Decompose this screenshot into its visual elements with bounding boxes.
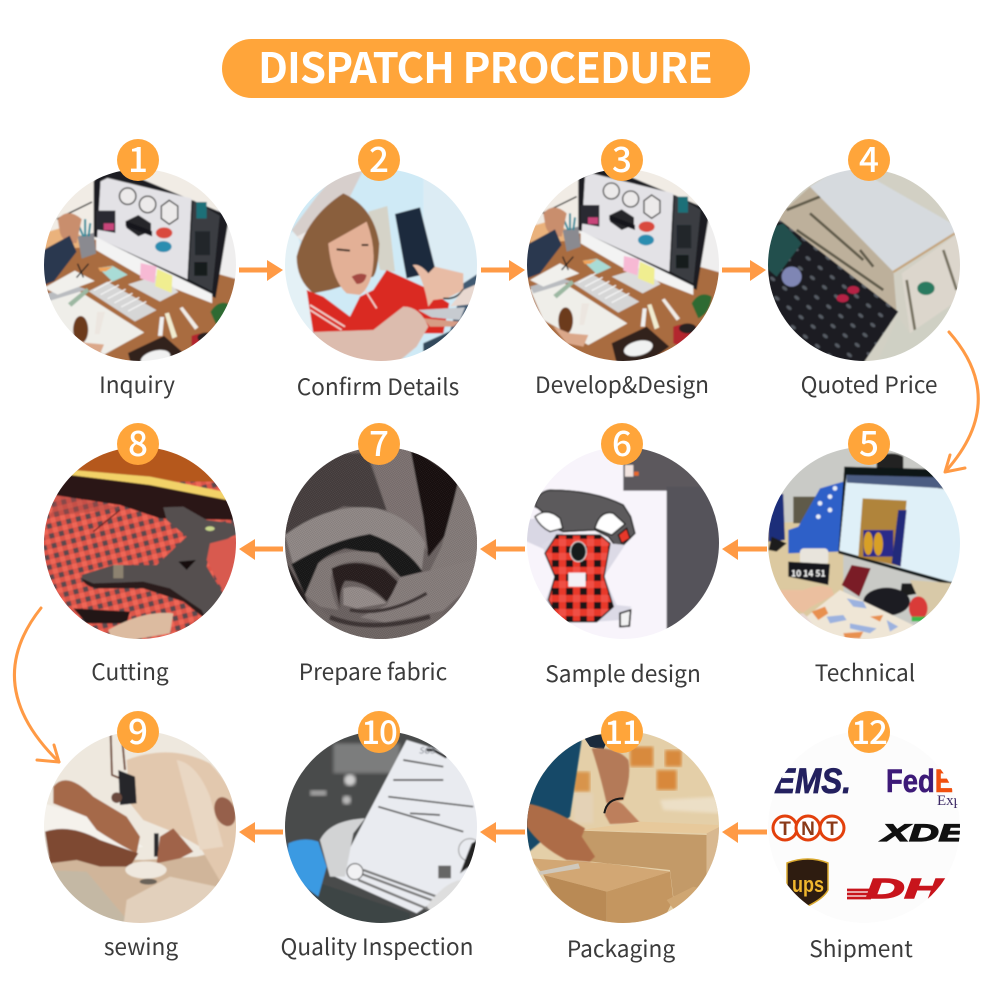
step 3 badge: 3 bbox=[612, 132, 632, 183]
logo: DHL: DH bbox=[866, 873, 944, 904]
step 9 photo: sewing machine bbox=[40, 727, 240, 927]
step 5 photo: technical workstation bbox=[768, 448, 960, 639]
step 4 badge: 4 bbox=[859, 132, 879, 183]
step 9 badge: 9 bbox=[128, 704, 148, 755]
logo: TNT bbox=[773, 816, 844, 840]
step 1 label: Inquiry bbox=[99, 367, 175, 400]
step 2 badge: 2 bbox=[369, 132, 389, 183]
curved arrow 4 to 5 bbox=[945, 332, 978, 472]
title pill bbox=[222, 35, 750, 98]
step 12 label: Shipment bbox=[809, 931, 913, 964]
step 6 photo: harness sample on screen bbox=[527, 449, 719, 639]
step 10 photo: quality report bbox=[285, 732, 477, 923]
step 8 label: Cutting bbox=[91, 654, 169, 687]
logo: EMS: EMS. bbox=[774, 762, 851, 801]
step 11 badge: 11 bbox=[604, 706, 640, 754]
arrow 1 to 2 bbox=[239, 260, 283, 281]
step 9 badge bbox=[117, 704, 159, 755]
step 5 badge: 5 bbox=[859, 416, 879, 467]
step 11 label: Packaging bbox=[567, 931, 675, 964]
logo: UPS shield bbox=[787, 859, 828, 906]
logo: TNT: T bbox=[826, 819, 838, 840]
curved arrow 8 to 9 bbox=[14, 608, 59, 762]
title text: DISPATCH PROCEDURE bbox=[258, 35, 713, 96]
step 10 photo: quality report: SGS bbox=[419, 744, 436, 756]
step 8 badge bbox=[117, 416, 159, 467]
arrow 5 to 6 bbox=[722, 539, 767, 560]
logo: FedEx: FedE bbox=[886, 763, 953, 799]
step 8 photo: cutting plaid fabric bbox=[40, 443, 240, 643]
step 4 photo: calculator and money bbox=[768, 170, 960, 361]
step 5 photo: technical workstation: 10 14 51 bbox=[791, 568, 826, 580]
logo: TNT: N bbox=[801, 819, 815, 840]
step 2 badge bbox=[358, 132, 400, 183]
step 7 photo: grey fabric swirl bbox=[285, 448, 477, 639]
arrow 10 to 11 bbox=[480, 822, 525, 843]
step 5 badge bbox=[848, 416, 890, 467]
step 10 label: Quality Inspection bbox=[281, 929, 473, 962]
step 10 badge: 10 bbox=[361, 706, 397, 754]
step 3 badge bbox=[601, 132, 643, 183]
arrow 9 to 10 bbox=[239, 822, 283, 843]
step 3 photo: develop and design desk bbox=[527, 170, 719, 361]
step 3 label: Develop&Design bbox=[535, 367, 709, 400]
step 2 label: Confirm Details bbox=[297, 369, 459, 402]
step 6 label: Sample design bbox=[545, 656, 701, 689]
logo: FedEx: Exp bbox=[937, 793, 961, 809]
logo: TNT: T bbox=[779, 819, 791, 840]
step 4 label: Quoted Price bbox=[801, 367, 937, 400]
step 7 badge: 7 bbox=[369, 416, 389, 467]
step 12 badge: 12 bbox=[851, 706, 887, 754]
arrow 3 to 4 bbox=[722, 260, 766, 281]
step 6 badge bbox=[601, 416, 643, 467]
arrow 6 to 7 bbox=[480, 539, 525, 560]
step 1 photo: inquiry desk bbox=[44, 170, 236, 361]
logo: XD: XDE bbox=[879, 820, 968, 847]
step 1 badge: 1 bbox=[128, 132, 148, 183]
step 8 badge: 8 bbox=[128, 416, 148, 467]
step 7 badge bbox=[358, 416, 400, 467]
step 6 badge: 6 bbox=[612, 416, 632, 467]
step 5 label: Technical bbox=[815, 655, 915, 688]
arrow 11 to 12 bbox=[722, 822, 767, 843]
arrow 7 to 8 bbox=[239, 539, 283, 560]
logo: DHL bbox=[847, 878, 946, 900]
step 7 label: Prepare fabric bbox=[299, 654, 447, 687]
arrow 2 to 3 bbox=[481, 260, 525, 281]
logo: UPS shield: ups bbox=[792, 872, 824, 897]
step 4 badge bbox=[848, 132, 890, 183]
step 1 badge bbox=[117, 132, 159, 183]
step 2 photo: confirm details bbox=[285, 170, 477, 361]
step 11 photo: packaging boxes bbox=[523, 727, 723, 927]
step 12 courier logos bbox=[772, 768, 960, 906]
logo: FedEx bbox=[888, 768, 958, 808]
step 9 label: sewing bbox=[104, 929, 178, 962]
